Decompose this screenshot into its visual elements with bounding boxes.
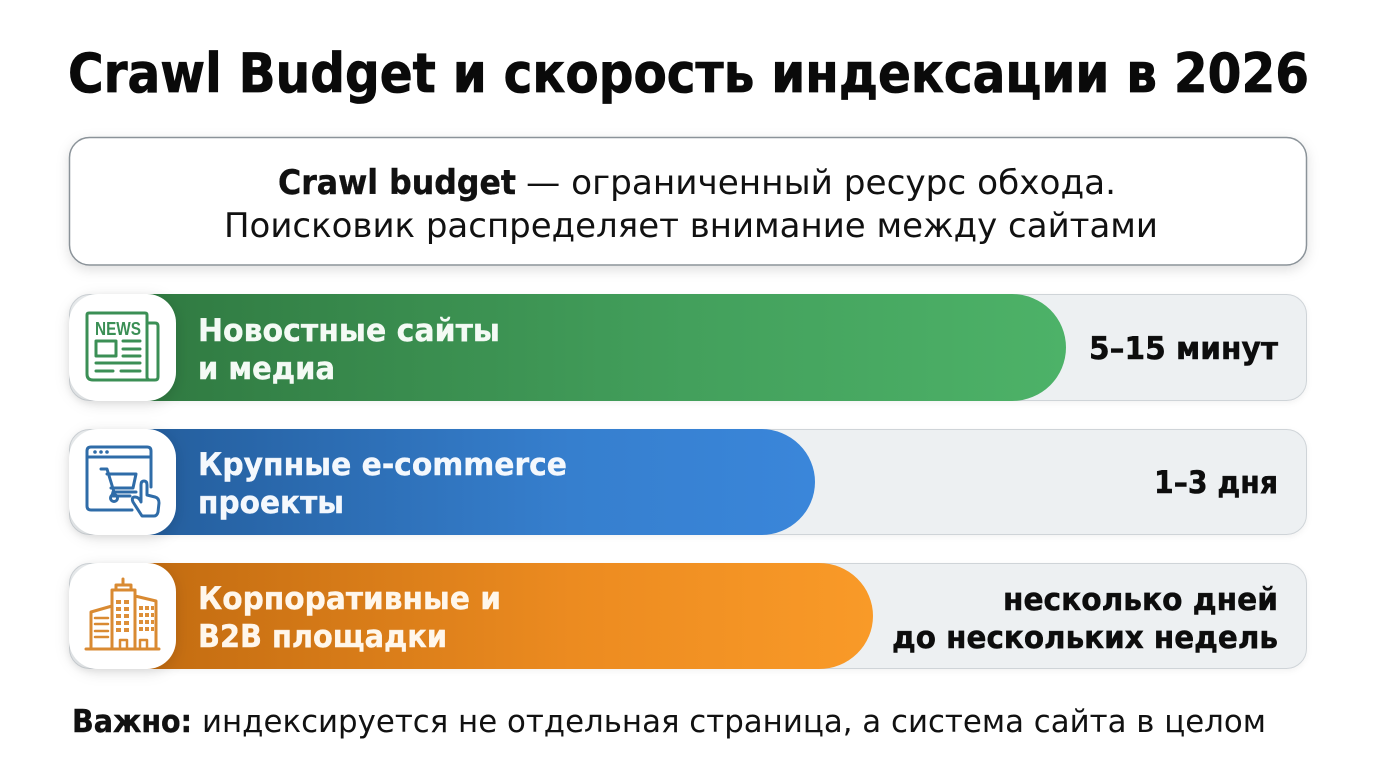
label: corporate (198, 581, 501, 655)
definition text: Поисковик распределяет внимание между сайтами (224, 206, 1158, 246)
label: e-commerce: Крупные e-commerce (198, 447, 567, 483)
panel: e-commerce row (69, 429, 1306, 535)
panel: definition (70, 138, 1306, 265)
icon: office buildings (69, 563, 176, 669)
progress bar: corporate (120, 563, 873, 669)
definition text: — ограниченный ресурс обхода. (526, 163, 1116, 203)
progress bar: e-commerce (120, 429, 815, 535)
footnote: индексируется не отдельная страница, а система сайта в целом (202, 704, 1266, 740)
label: e-commerce: проекты (198, 485, 344, 521)
label: corporate: B2B площадки (198, 619, 447, 655)
label: news (198, 313, 500, 387)
value: corporate: несколько дней (1003, 582, 1278, 618)
icon: shopping cart (69, 429, 176, 535)
label: news: Новостные сайты (198, 313, 500, 349)
value: e-commerce: 1–3 дня (1154, 465, 1278, 501)
value: corporate: до нескольких недель (892, 620, 1278, 656)
definition text: Crawl budget (278, 163, 516, 203)
progress bar: news (120, 294, 1066, 401)
value: news: 5–15 минут (1089, 331, 1278, 367)
value: corporate (892, 582, 1278, 656)
panel: news sites row (69, 294, 1306, 401)
label: corporate: Корпоративные и (198, 581, 501, 617)
label: news: и медиа (198, 351, 335, 387)
icon: newspaper: NEWS (95, 319, 141, 339)
panel: corporate row (69, 563, 1306, 669)
footnote: Важно: (72, 704, 192, 740)
icon: newspaper (69, 294, 176, 401)
definition text (224, 163, 1158, 246)
label: e-commerce (198, 447, 567, 521)
